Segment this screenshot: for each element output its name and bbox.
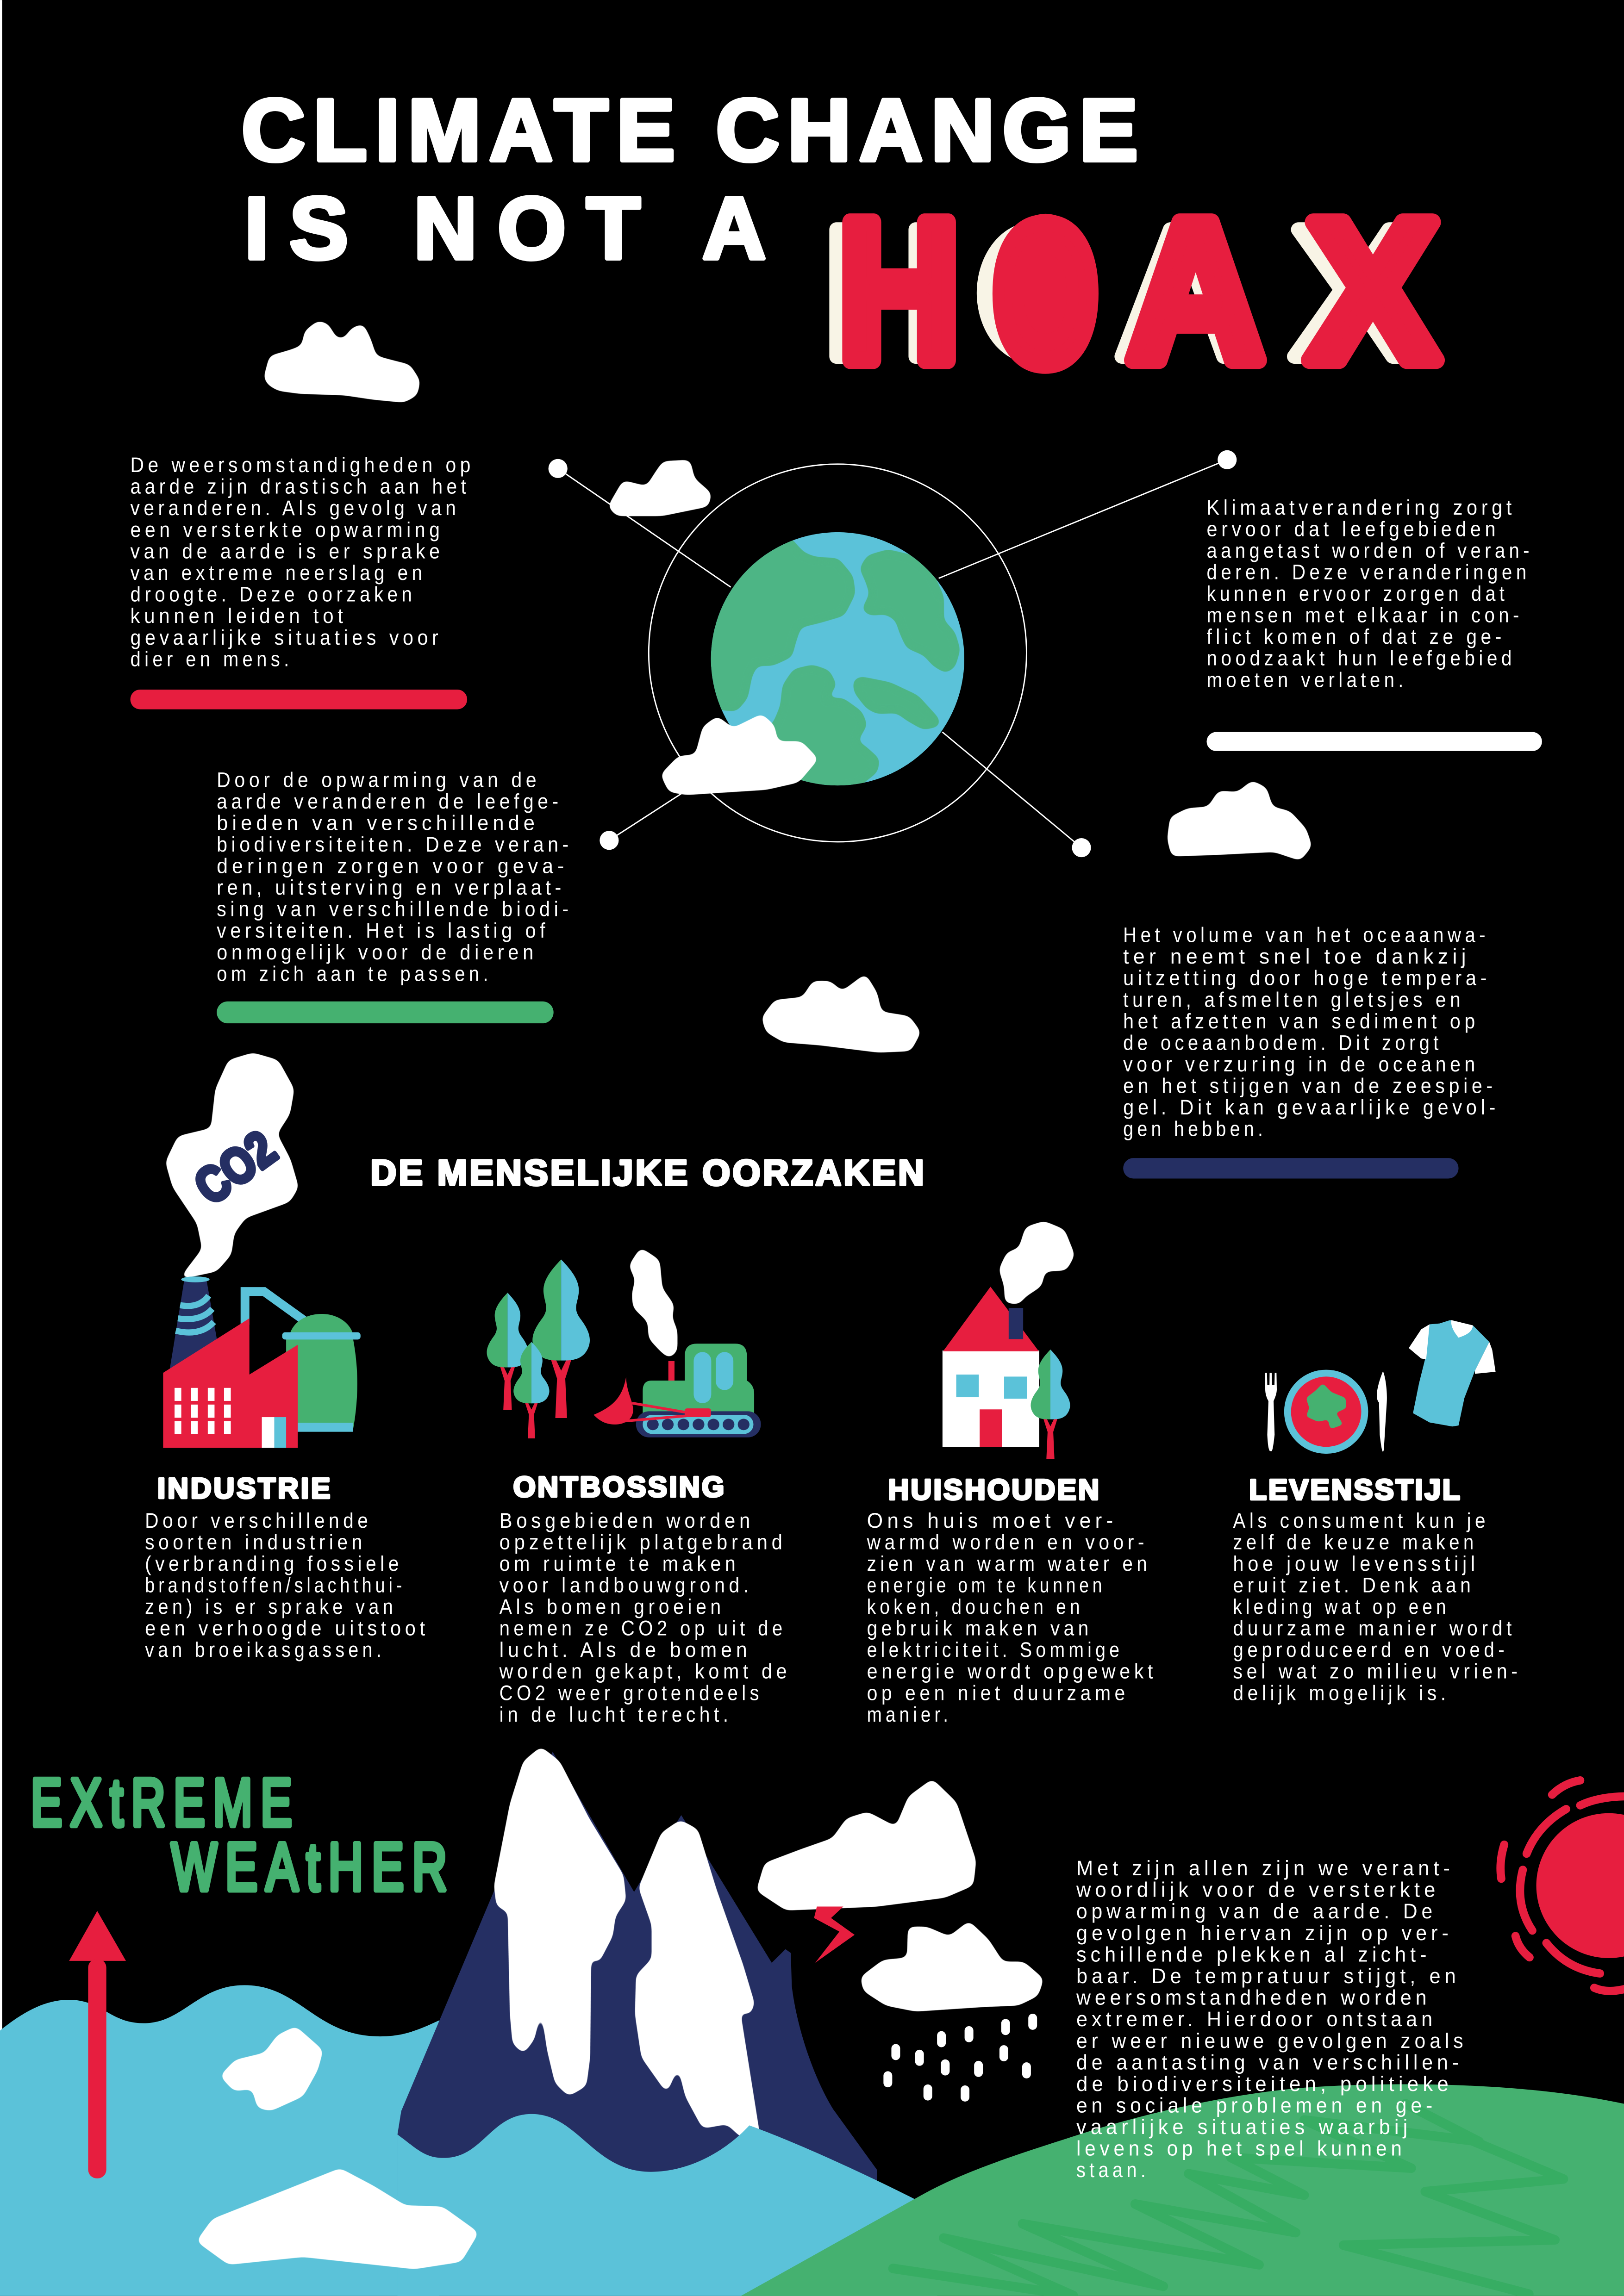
knife — [1377, 1371, 1387, 1452]
chimney — [170, 1280, 218, 1369]
text block: biodiversity: Door de opwarming van de — [217, 768, 540, 791]
text block: ontbossing: opzettelijk platgebrand — [500, 1530, 787, 1554]
bulldozer track — [636, 1411, 761, 1437]
title word: HOAX: A — [1128, 179, 1264, 403]
diagram: earth with connector lines — [549, 450, 1237, 857]
text block: weather — [131, 453, 475, 671]
text block: ontbossing: Als bomen groeien — [500, 1595, 725, 1618]
text block: conclusion: levens op het spel kunnen — [1076, 2137, 1406, 2160]
text block: levensstijl — [1233, 1509, 1522, 1705]
text block: huishouden: warmd worden en voor- — [867, 1530, 1148, 1554]
title — [242, 81, 1138, 277]
house smoke — [999, 1221, 1075, 1304]
orbit ring — [649, 464, 1026, 842]
bar: white — [1206, 732, 1542, 751]
broccoli — [1306, 1383, 1346, 1429]
text block: huishouden: energie om te kunnen — [867, 1574, 1106, 1597]
heading: extreme weather: EXtREME — [31, 1765, 300, 1840]
bulldozer exhaust — [668, 1361, 675, 1381]
text block: levensstijl: delijk mogelijk is. — [1233, 1681, 1450, 1705]
snow cap right — [635, 1820, 760, 2137]
text block: huishouden: zien van warm water en — [867, 1552, 1151, 1575]
text block: huishouden: koken, douchen en — [867, 1595, 1084, 1618]
text block: levensstijl: eruit ziet. Denk aan — [1233, 1574, 1474, 1597]
cloud: right of globe — [1167, 780, 1312, 861]
cloud: top left — [263, 321, 420, 403]
text block: habitats: mensen met elkaar in con- — [1206, 604, 1523, 627]
text block: biodiversity: ren, uitsterving en verplaat- — [217, 876, 565, 899]
text block: industrie: zen) is er sprake van — [145, 1595, 397, 1618]
bulldozer blade — [593, 1377, 633, 1425]
title: IS NOT A — [244, 179, 766, 277]
text block: habitats: ervoor dat leefgebieden — [1206, 517, 1499, 541]
text block: biodiversity: om zich aan te passen. — [217, 962, 492, 985]
plate — [1284, 1370, 1368, 1454]
text block: conclusion: opwarming van de aarde. De — [1076, 1899, 1437, 1923]
text block: conclusion: de aantasting van verschillen- — [1076, 2050, 1463, 2074]
bulldozer smoke — [629, 1247, 677, 1359]
text block: conclusion: staan. — [1076, 2158, 1149, 2182]
title word: HOAX — [824, 179, 1439, 406]
text block: ocean: uitzetting door hoge tempera- — [1123, 966, 1491, 990]
bulldozer body — [643, 1344, 754, 1417]
icon: trees and bulldozer — [487, 1247, 761, 1438]
text block: ocean: turen, afsmelten gletsjes en — [1123, 988, 1464, 1011]
fork — [1265, 1373, 1277, 1451]
text block: biodiversity: bieden van verschillende — [217, 811, 539, 834]
text block: biodiversity: versiteiten. Het is lastig of — [217, 919, 549, 942]
text block: levensstijl: hoe jouw levensstijl — [1233, 1552, 1479, 1575]
text block: conclusion: woordlijk voor de versterkte — [1076, 1878, 1439, 1902]
tree front — [513, 1342, 550, 1438]
text block: huishouden: manier. — [867, 1703, 952, 1726]
text block: conclusion: Met zijn allen zijn we verant- — [1076, 1856, 1454, 1880]
text block: weather: gevaarlijke situaties voor — [131, 626, 442, 649]
bar: green — [217, 1002, 554, 1023]
door — [980, 1409, 1002, 1447]
CO2 smoke — [165, 1052, 299, 1280]
text block: conclusion — [1076, 1856, 1468, 2182]
water: front wave — [397, 2114, 937, 2296]
lightning — [814, 1907, 855, 1963]
text block: ocean: ter neemt snel toe dankzij — [1123, 945, 1470, 968]
icon: plate, cutlery, shirt — [1265, 1320, 1496, 1454]
tree tall — [532, 1259, 590, 1418]
text block: ocean: de oceaanbodem. Dit zorgt — [1123, 1031, 1443, 1054]
subheading: industrie: INDUSTRIE — [157, 1473, 330, 1505]
title: CLIMATE CHANGE — [242, 81, 1138, 179]
title word: HOAX: A — [1118, 190, 1256, 396]
text block: industrie: een verhoogde uitstoot — [145, 1617, 429, 1640]
text block: weather: dier en mens. — [131, 647, 293, 671]
text block: huishouden: gebruik maken van — [867, 1617, 1093, 1640]
text block: weather: aarde zijn drastisch aan het — [131, 475, 470, 498]
text block: levensstijl: zelf de keuze maken — [1233, 1530, 1478, 1554]
text block: biodiversity — [217, 768, 573, 985]
tank — [286, 1314, 357, 1431]
bar: red — [131, 690, 467, 709]
text block: ontbossing — [499, 1509, 791, 1726]
text block: biodiversity: aarde veranderen de leefge- — [217, 790, 562, 813]
text block: biodiversity: deringen zorgen voor geva- — [217, 854, 568, 878]
text block: weather: kunnen leiden tot — [131, 604, 347, 628]
hill: green with zigzag — [741, 2084, 1624, 2296]
text block: weather: droogte. Deze oorzaken — [131, 583, 416, 606]
CO2 label: CO2 — [184, 1120, 286, 1215]
text block: ontbossing: Bosgebieden worden — [500, 1509, 754, 1532]
text block: ontbossing: in de lucht terecht. — [500, 1703, 732, 1726]
subheading: huishouden: HUISHOUDEN — [888, 1474, 1099, 1506]
text block: conclusion: baar. De tempratuur stijgt, en — [1076, 1964, 1460, 1988]
wall — [943, 1350, 1039, 1447]
text block: levensstijl: geproduceerd en voed- — [1233, 1638, 1508, 1661]
text block: industrie: soorten industrien — [145, 1530, 366, 1554]
rain drops — [883, 2014, 1037, 2102]
mountains — [397, 1747, 877, 2196]
heading: extreme weather — [31, 1765, 456, 1904]
text block: huishouden: op een niet duurzame — [867, 1681, 1129, 1705]
globe ocean — [711, 532, 964, 785]
text block: ocean: gen hebben. — [1123, 1117, 1267, 1141]
text block: ocean: Het volume van het oceaanwa- — [1123, 923, 1489, 947]
subheading: levensstijl: LEVENSSTIJL — [1249, 1474, 1460, 1506]
text block: levensstijl: sel wat zo milieu vrien- — [1233, 1660, 1522, 1683]
text block: ocean — [1123, 923, 1499, 1141]
text block: conclusion: er weer nieuwe gevolgen zoals — [1076, 2029, 1468, 2053]
water: back wave — [0, 1985, 439, 2296]
title word: HOAX: X — [1293, 190, 1426, 396]
text block: ontbossing: voor landbouwgrond. — [500, 1574, 753, 1597]
heading: extreme weather: WEAtHER — [171, 1829, 456, 1904]
text block: habitats: Klimaatverandering zorgt — [1206, 496, 1516, 519]
subheading: ontbossing: ONTBOSSING — [513, 1471, 724, 1503]
cloud: middle — [762, 974, 921, 1052]
text block: industrie: brandstoffen/slachthui- — [145, 1574, 406, 1597]
text block: biodiversity: sing van verschillende biodi- — [217, 897, 573, 921]
text block: conclusion: schillende plekken al zicht- — [1076, 1942, 1430, 1966]
bar: navy — [1123, 1158, 1459, 1178]
text block: conclusion: extremer. Hierdoor ontstaan — [1076, 2007, 1437, 2031]
text block: weather: veranderen. Als gevolg van — [131, 496, 460, 520]
text block: industrie — [145, 1509, 429, 1661]
sun — [1500, 1780, 1624, 1991]
ice floe large — [196, 2168, 479, 2269]
text block: industrie: (verbranding fossiele — [145, 1552, 403, 1575]
text block: conclusion: vaarlijke situaties waarbij — [1076, 2115, 1412, 2139]
text block: industrie: Door verschillende — [145, 1509, 372, 1532]
text block: ocean: gel. Dit kan gevaarlijke gevol- — [1123, 1095, 1499, 1119]
text block: habitats: noodzaakt hun leefgebied — [1206, 647, 1516, 670]
text block: ontbossing: CO2 weer grotendeels — [500, 1681, 763, 1705]
text block: ocean: voor verzuring in de oceanen — [1123, 1052, 1479, 1076]
ice floe small — [220, 2026, 323, 2111]
text block: ontbossing: lucht. Als de bomen — [500, 1638, 751, 1661]
factory building — [163, 1319, 298, 1448]
shirt — [1413, 1320, 1489, 1426]
title word: HOAX: O — [993, 182, 1098, 406]
globe continents — [711, 540, 960, 786]
text block: conclusion: gevolgen hiervan zijn op ver- — [1076, 1921, 1453, 1945]
rain cloud — [860, 1921, 1044, 2011]
text block: levensstijl: Als consument kun je — [1233, 1509, 1489, 1532]
cloud: on globe — [661, 714, 818, 795]
text block: ontbossing: worden gekapt, komt de — [499, 1660, 791, 1683]
title word: HOAX: H — [824, 190, 953, 396]
heading: human causes: DE MENSELIJKE OORZAKEN — [370, 1153, 924, 1193]
connector lines — [558, 460, 1227, 848]
cloud: above globe — [608, 460, 712, 516]
text block: levensstijl: kleding wat op een — [1233, 1595, 1450, 1618]
text block: levensstijl: duurzame manier wordt — [1233, 1617, 1516, 1640]
text block: ocean: het afzetten van sediment op — [1123, 1009, 1479, 1033]
text block: ocean: en het stijgen van de zeespie- — [1123, 1074, 1497, 1097]
text block: conclusion: weersomstandheden worden — [1076, 1985, 1430, 2009]
text block: habitats — [1206, 496, 1533, 692]
text block: huishouden — [867, 1509, 1157, 1726]
house tree — [1031, 1350, 1070, 1459]
mountain body — [397, 1752, 877, 2196]
text block: industrie: van broeikasgassen. — [145, 1638, 385, 1661]
text block: conclusion: en sociale problemen en ge- — [1076, 2093, 1437, 2117]
icon: factory with CO2 cloud — [163, 1052, 361, 1448]
text block: weather: van extreme neerslag en — [131, 561, 426, 585]
snow cap left — [494, 1747, 626, 2097]
text block: habitats: kunnen ervoor zorgen dat — [1206, 582, 1508, 605]
title word: HOAX: X — [1308, 179, 1439, 403]
text block: weather: een versterkte opwarming — [131, 518, 443, 541]
text block: biodiversity: biodiversiteiten. Deze veran- — [217, 833, 573, 856]
text block: habitats: aangetast worden of veran- — [1206, 539, 1533, 562]
storm cloud — [756, 1779, 976, 1910]
text block: conclusion: de biodiversiteiten, politieke — [1076, 2072, 1453, 2096]
windows — [956, 1375, 979, 1397]
roof — [943, 1287, 1039, 1351]
text block: habitats: flict komen of dat ze ge- — [1206, 625, 1505, 648]
text block: ontbossing: nemen ze CO2 op uit de — [500, 1617, 787, 1640]
title word: HOAX: H — [838, 179, 960, 403]
arrow: rising — [69, 1911, 126, 2178]
text block: ontbossing: om ruimte te maken — [500, 1552, 739, 1575]
text block: huishouden: elektriciteit. Sommige — [867, 1638, 1123, 1661]
text block: habitats: deren. Deze veranderingen — [1206, 560, 1530, 584]
pipe — [245, 1292, 311, 1325]
text block: huishouden: energie wordt opgewekt — [867, 1660, 1157, 1683]
text block: weather: De weersomstandigheden op — [131, 453, 475, 477]
text block: weather: van de aarde is er sprake — [131, 540, 443, 563]
text block: biodiversity: onmogelijk voor de dieren — [217, 940, 537, 964]
icon: house — [943, 1221, 1075, 1459]
connector dots — [549, 450, 1237, 857]
text block: habitats: moeten verlaten. — [1206, 668, 1407, 692]
chimney — [1009, 1308, 1023, 1339]
text block: huishouden: Ons huis moet ver- — [867, 1509, 1118, 1532]
tree left — [487, 1293, 528, 1410]
